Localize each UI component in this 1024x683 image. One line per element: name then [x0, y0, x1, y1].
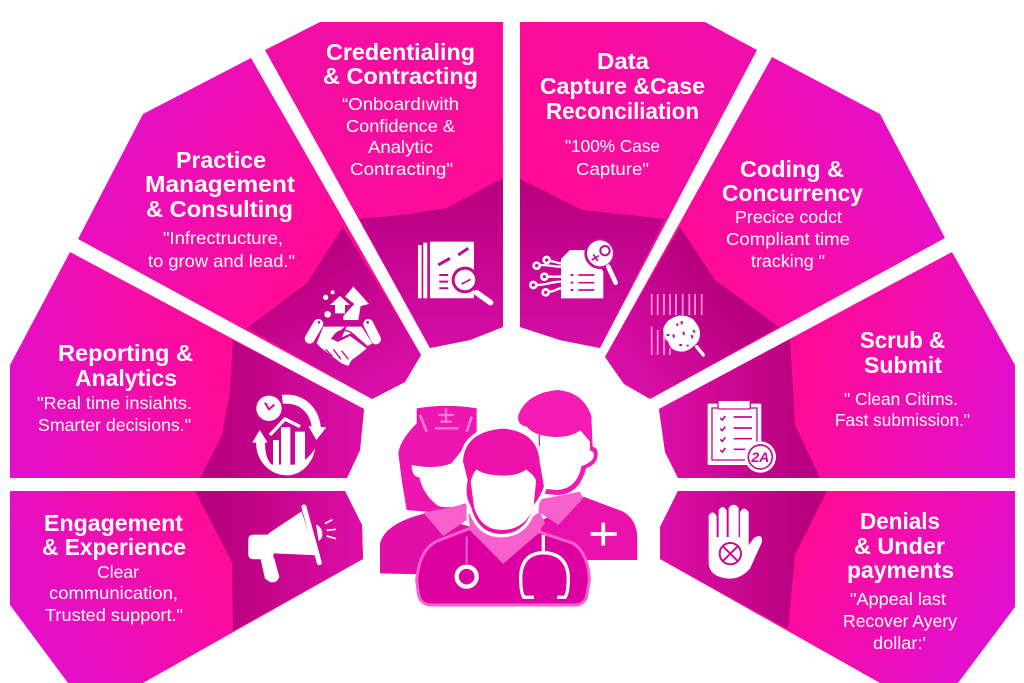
quote: " Clean Citims.	[844, 389, 958, 409]
panel shape	[265, 22, 503, 348]
heading	[847, 508, 954, 583]
quote: Recover Ayery	[843, 611, 957, 631]
dark icon area	[200, 340, 364, 478]
quote: Smarter decisions."	[38, 415, 191, 435]
dark icon area	[359, 178, 503, 348]
icon: document with circuit and magnifier	[530, 238, 616, 298]
quote: communication,	[49, 583, 178, 603]
heading: Scrub &	[860, 327, 945, 353]
quote	[148, 228, 295, 271]
dark icon area	[605, 227, 779, 399]
heading	[145, 147, 295, 222]
heading: & Consulting	[146, 196, 293, 222]
quote: Clear	[97, 562, 139, 582]
panel: data capture and case reconciliation	[520, 22, 757, 348]
heading: Data	[597, 48, 649, 74]
heading: Engagement	[44, 510, 183, 536]
icon: clock and chart cycle	[252, 396, 326, 475]
quote: dollar:'	[873, 633, 926, 653]
quote	[45, 562, 183, 625]
panel shape	[10, 252, 364, 478]
heading: Analytics	[75, 365, 177, 391]
quote	[342, 94, 459, 179]
quote: Fast submission."	[835, 410, 970, 430]
quote	[37, 393, 192, 435]
panel: credentialing and contracting	[265, 22, 503, 348]
panel shape	[660, 491, 1015, 683]
heading: Practice	[176, 147, 266, 173]
icon: clipboard with 24h badge: 2A	[750, 449, 769, 465]
heading	[58, 340, 193, 391]
quote: "Appeal last	[850, 589, 946, 609]
panel: engagement and experience	[10, 491, 363, 683]
panel shape	[10, 491, 363, 683]
panel: coding and concurrency	[605, 57, 945, 399]
quote	[565, 136, 660, 179]
heading	[540, 48, 705, 124]
heading: Capture &Case	[540, 73, 705, 99]
icon: handshake with arrows	[310, 287, 376, 366]
icon: megaphone	[248, 507, 336, 582]
quote: "100% Case	[565, 136, 660, 156]
heading: Credentialing	[326, 39, 475, 65]
icon: report with magnifier	[418, 242, 491, 303]
heading: Concurrency	[722, 180, 863, 206]
doctor	[417, 427, 589, 605]
heading	[860, 327, 945, 378]
nurse	[380, 406, 477, 575]
heading: & Under	[854, 533, 945, 559]
quote: Compliant time	[726, 229, 850, 249]
male nurse	[518, 390, 637, 560]
icon: code lines with magnifier	[652, 294, 703, 355]
heading: Denials	[860, 508, 940, 534]
panel: practice management and consulting	[78, 58, 421, 399]
quote: Analytic	[368, 137, 433, 157]
quote: "Real time insiahts.	[37, 393, 192, 413]
heading: payments	[847, 557, 954, 583]
quote: Trusted support."	[45, 605, 183, 625]
heading: & Experience	[42, 534, 186, 560]
panel: reporting and analytics	[10, 252, 364, 478]
heading: Reconciliation	[546, 98, 699, 124]
quote: "Infrectructure,	[163, 228, 283, 248]
heading	[323, 39, 478, 89]
quote: tracking "	[751, 251, 825, 271]
heading	[722, 156, 863, 206]
quote	[726, 207, 850, 271]
quote: “Onboardıwith	[342, 94, 459, 114]
icon: clipboard with 24h badge	[708, 400, 776, 473]
panel shape	[78, 58, 421, 399]
dark icon area	[659, 339, 820, 478]
panel shape	[605, 57, 945, 399]
icon: stop hand	[709, 505, 762, 579]
quote: Precice codct	[735, 207, 842, 227]
quote: Confidence &	[346, 116, 455, 136]
quote	[843, 589, 957, 653]
central icon: medical team	[380, 390, 637, 605]
dark icon area	[520, 179, 665, 348]
quote: to grow and lead."	[148, 251, 295, 271]
heading: Management	[145, 171, 295, 197]
heading: Submit	[864, 352, 942, 378]
panel shape	[520, 22, 757, 348]
quote	[835, 389, 970, 430]
panel shape	[659, 252, 1015, 478]
panel: scrub and submit	[659, 252, 1015, 478]
heading	[42, 510, 186, 560]
heading: Coding &	[740, 156, 844, 182]
quote: Capture"	[576, 159, 649, 179]
panel: denials and underpayments	[660, 491, 1015, 683]
dark icon area	[195, 491, 363, 631]
heading: Reporting &	[58, 340, 193, 366]
dark icon area	[247, 227, 421, 399]
heading: & Contracting	[323, 63, 478, 89]
quote: Contracting"	[350, 159, 453, 179]
dark icon area	[660, 491, 827, 629]
